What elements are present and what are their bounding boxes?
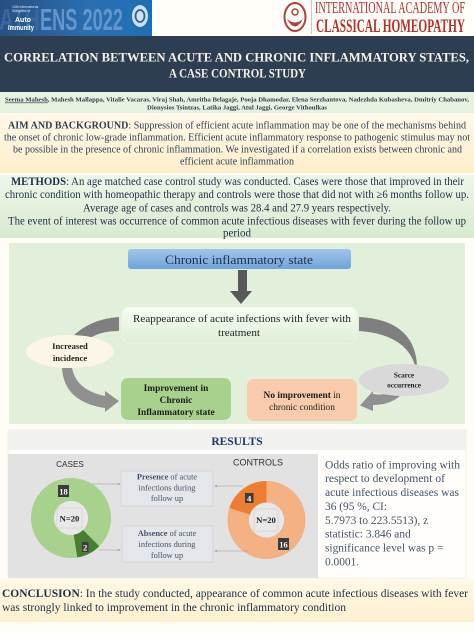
legend box: presence: follow up (151, 494, 183, 503)
box: improvement in chronic inflammatory state: Chronic (160, 396, 192, 406)
arrow: upper right curve (359, 317, 417, 365)
panel: conclusion: was strongly linked to improvement in the chronic inflammatory condition (2, 602, 346, 614)
panel: charts background (8, 454, 318, 578)
header: logos strip (0, 0, 474, 37)
box: no improvement: chronic condition (269, 403, 335, 413)
donut chart: controls (229, 481, 295, 550)
conference logo: Athens 2022: 13th International (12, 5, 38, 9)
box: chronic inflammatory state (128, 249, 351, 269)
legend box: presence: Presence of acute (137, 472, 197, 482)
results heading (8, 430, 466, 450)
panel: flow diagram (9, 243, 465, 424)
legend box: absence (122, 526, 213, 562)
box: no improvement (247, 379, 357, 421)
box: reappearance of acute infections: treatment (218, 328, 260, 339)
conference logo: Athens 2022: Congress of (12, 9, 30, 13)
panel: conclusion (0, 579, 474, 622)
oval: increased incidence: Increased (52, 341, 88, 351)
conference logo: Athens 2022 (0, 0, 152, 37)
panel: aim and background: AIM AND BACKGROUND: Suppression of efficient acute inflammation may be one of the mechanisms behind (8, 120, 467, 132)
text: odds ratio: respect to development of (325, 473, 445, 485)
value: 16: 16 (279, 540, 288, 550)
heading: cases: CASES (56, 460, 84, 469)
conference logo: Athens 2022: ENS 2022 (40, 2, 123, 37)
text: odds ratio: acute infectious diseases was (325, 487, 460, 499)
text: odds ratio: 0.0001. (325, 556, 359, 568)
authors (0, 92, 474, 113)
value: 2: 2 (83, 542, 87, 552)
arrow: lower left curve to improvement (62, 368, 119, 412)
conference logo: Athens 2022: Immunity (8, 25, 34, 32)
title band: A CASE CONTROL STUDY (169, 66, 307, 80)
text: odds ratio: significance level was p = (325, 542, 443, 554)
box: chronic inflammatory state: Chronic inflammatory state (165, 252, 313, 267)
title band: CORRELATION BETWEEN ACUTE AND CHRONIC INFLAMMATORY STATES, (4, 50, 469, 64)
oval: increased incidence: incidence (53, 353, 87, 363)
panel: aim and background: be possible in the presence of chronic inflammation. We investigated if a correlation exists between chronic and (13, 144, 463, 156)
value: 4: 4 (247, 494, 252, 504)
panel: results (8, 430, 466, 578)
panel: aim and background: efficient acute inflammation (180, 156, 295, 168)
oval: scarce occurrence: occurrence (387, 382, 421, 390)
legend box: presence: infections during (138, 484, 196, 492)
oval: increased incidence (26, 335, 114, 368)
box: no improvement: No improvement in (264, 391, 341, 401)
legend box: absence: follow up (151, 551, 183, 560)
arrow: lower right curve to no improvement (360, 391, 403, 411)
box: improvement in chronic inflammatory state: Inflammatory state (137, 408, 215, 418)
value: 18: 18 (59, 486, 68, 496)
box: reappearance of acute infections (122, 307, 357, 343)
heading: controls: CONTROLS (233, 458, 283, 468)
arrow: down (230, 270, 252, 304)
authors: Dionysios Tsintzas, Latika Jaggi, Atul Jaggi, George Vithoulkas (147, 104, 328, 112)
title band (0, 36, 474, 92)
box: improvement in chronic inflammatory state (121, 378, 231, 420)
connector arrows (92, 483, 248, 552)
results heading: RESULTS (211, 436, 263, 448)
legend box: absence: Absence of acute (138, 529, 197, 538)
value box: N=20: N=20 (60, 514, 79, 524)
panel: conclusion: CONCLUSION: In the study conducted, appearance of common acute infectious diseases with fever (2, 588, 468, 600)
donut chart: cases (42, 485, 100, 558)
text: odds ratio: 36 (95 %, CI: (325, 501, 387, 513)
panel: methods: Average age of cases and controls was 28.4 and 27.9 years respectively. (83, 202, 391, 214)
value box: N=20: N=20 (256, 515, 276, 525)
oval: scarce occurrence (359, 364, 449, 396)
text: odds ratio: 5.7973 to 223.5513), z (325, 515, 428, 527)
panel: methods: METHODS: An age matched case control study was conducted. Cases were those that improved in their (11, 176, 464, 188)
oval: scarce occurrence: Scarce (394, 372, 414, 380)
conference logo: Athens 2022: ATH (0, 2, 40, 37)
legend box: absence: infections during (138, 540, 196, 549)
text: odds ratio: Odds ratio of improving with (325, 460, 460, 472)
text: odds ratio (325, 460, 460, 568)
academy logo (284, 0, 465, 37)
authors: Seema Mahesh , Mahesh Mallappa, Vitalie Vacaras, Viraj Shah, Amritha Belagaje, Pooja Dhamodar, Elena Serzhantova, Nadezhda Kubasheva, Dmitriy Chabanov, (5, 96, 469, 104)
legend box: presence (121, 471, 213, 506)
box: improvement in chronic inflammatory state: Improvement in (144, 384, 209, 394)
panel: methods (0, 175, 474, 240)
conference logo: Athens 2022: Auto (15, 17, 31, 24)
arrow: upper left curve (72, 317, 119, 337)
box: reappearance of acute infections: Reappearance of acute infections with fever with (133, 314, 352, 325)
text: odds ratio: statistic: 3.846 and (325, 528, 411, 540)
panel: methods: period (223, 228, 251, 240)
panel: aim and background (0, 113, 474, 173)
